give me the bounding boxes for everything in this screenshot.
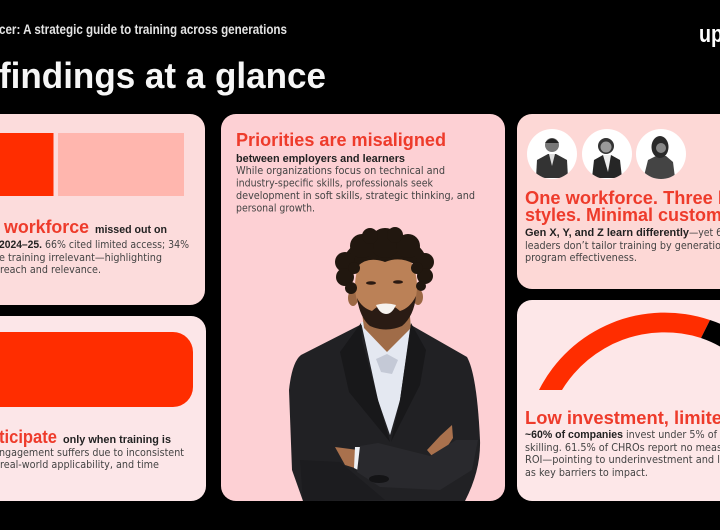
main title: findings at a glance [0, 55, 326, 96]
panel body text: development in soft skills, strategic thinking, and [236, 191, 475, 202]
panel heading: styles. Minimal custom [525, 205, 720, 225]
panel background [0, 114, 205, 305]
bar: red [0, 332, 193, 407]
panel body text [525, 227, 720, 264]
panel body text: as key barriers to impact. [525, 468, 648, 479]
header subtitle: cer: A strategic guide to training across generations [0, 22, 287, 37]
panel body text: While organizations focus on technical and [236, 166, 445, 177]
panel body text: Gen X, Y, and Z learn differently [525, 227, 690, 239]
panel heading: Priorities are misaligned [236, 130, 446, 150]
panel heading: Low investment, limite [525, 408, 720, 428]
panel body text: e training irrelevant—highlighting [0, 253, 162, 264]
panel heading: workforce [3, 217, 89, 237]
panel body text: industry-specific skills, professionals seek [236, 178, 433, 190]
panel body text: ~60% of companies [525, 429, 623, 441]
panel body text: 2024–25. [0, 239, 42, 251]
panel body text: program effectiveness. [525, 253, 637, 264]
avatars: three leaders [527, 129, 686, 180]
bar: light share [58, 133, 184, 196]
gauge chart [539, 313, 720, 390]
panel: priorities [221, 114, 505, 501]
panel body text [525, 429, 720, 479]
panel background [0, 316, 206, 501]
panel heading: ticipate [0, 427, 57, 447]
panel heading: One workforce. Three l [525, 188, 720, 208]
panel subheading: between employers and learners [236, 153, 405, 165]
panel body text [0, 239, 189, 276]
photo: smiling man in black suit [289, 227, 480, 501]
panel body text: personal growth. [236, 204, 315, 214]
panel body text: 66% cited limited access; 34% [45, 240, 189, 251]
panel body text: invest under 5% of [626, 430, 717, 441]
panel body text [236, 166, 475, 214]
panel body text: reach and relevance. [0, 265, 101, 276]
panel: workforce missed out [0, 114, 205, 305]
panel body text [0, 448, 184, 471]
panel subheading: only when training is [63, 434, 171, 446]
panel: learning styles [517, 114, 720, 289]
panel body text: ngagement suffers due to inconsistent [0, 448, 184, 459]
panel: participation [0, 316, 206, 501]
panel: low investment [517, 300, 720, 501]
panel subheading: missed out on [95, 224, 167, 236]
bar: red share [0, 133, 54, 196]
panel heading [525, 188, 720, 225]
panel background [517, 114, 720, 289]
panel background [221, 114, 505, 501]
panel background [517, 300, 720, 501]
panel body text: real-world applicability, and time [0, 460, 159, 471]
